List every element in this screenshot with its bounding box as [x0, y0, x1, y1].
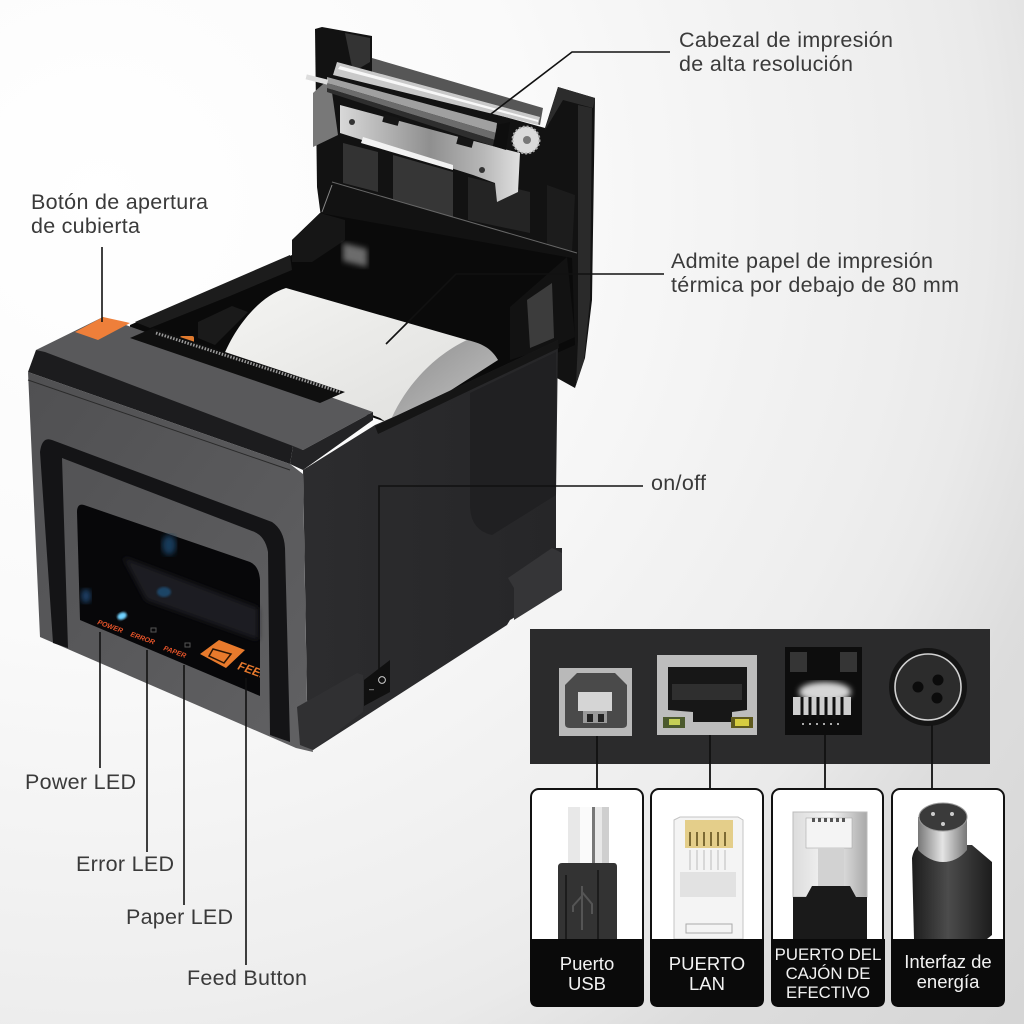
DIN plug [912, 803, 992, 939]
print head [306, 62, 540, 202]
right side panel [303, 340, 562, 750]
display window [77, 505, 271, 696]
caption: PUERTO [669, 953, 745, 974]
connector lines [597, 725, 932, 788]
power switch: – [369, 684, 374, 694]
DIN power socket [889, 648, 967, 726]
caption: energía [917, 971, 980, 992]
leader lines [100, 52, 670, 965]
label: error LED: Error LED [76, 852, 174, 876]
label: feed button: Feed Button [187, 966, 307, 990]
label: cover button: de cubierta [31, 214, 140, 238]
LED captions: POWER [96, 619, 124, 635]
caption: USB [568, 973, 606, 994]
card: cash drawer port [771, 789, 885, 1007]
power switch [364, 660, 390, 706]
panel: rear ports [530, 629, 990, 764]
feed icon [200, 640, 245, 668]
label: print head: de alta resolución [679, 52, 853, 76]
front panel [28, 372, 313, 752]
label: power LED: Power LED [25, 770, 136, 794]
RJ45 socket [657, 655, 757, 735]
caption: PUERTO DEL [775, 945, 881, 964]
USB plug [558, 807, 617, 939]
paper roll [223, 288, 498, 426]
interior and paper bay [130, 213, 575, 425]
printer [28, 27, 595, 752]
caption: Puerto [560, 953, 614, 974]
card: LAN port [650, 789, 764, 1007]
feed caption: FEED [236, 659, 271, 683]
RJ45 plug [674, 817, 743, 939]
front foot [297, 673, 363, 750]
top face [28, 317, 373, 470]
card: USB port [530, 789, 644, 1007]
lid inner panels [343, 143, 378, 192]
open lid [315, 27, 595, 388]
label: on/off: on/off [651, 471, 706, 495]
roller [327, 77, 497, 146]
label: paper: térmica por debajo de 80 mm [671, 273, 959, 297]
label: print head: Cabezal de impresión [679, 28, 893, 52]
RJ11 plug [793, 812, 867, 939]
caption: LAN [689, 973, 725, 994]
RJ11 socket [785, 647, 862, 735]
display window: PAPER [162, 645, 187, 660]
caption: CAJÓN DE [786, 964, 870, 983]
USB-B socket [559, 668, 632, 736]
label: paper: Admite papel de impresión [671, 249, 933, 273]
rear foot [508, 548, 562, 620]
power LED light [116, 611, 128, 621]
cover open button [75, 317, 130, 340]
caption: Interfaz de [904, 951, 992, 972]
caption: EFECTIVO [786, 983, 870, 1002]
display window: ERROR [129, 631, 155, 647]
label: cover button: Botón de apertura [31, 190, 208, 214]
label: paper LED: Paper LED [126, 905, 233, 929]
recessed frame [40, 439, 290, 742]
card: power interface [891, 789, 1005, 1007]
